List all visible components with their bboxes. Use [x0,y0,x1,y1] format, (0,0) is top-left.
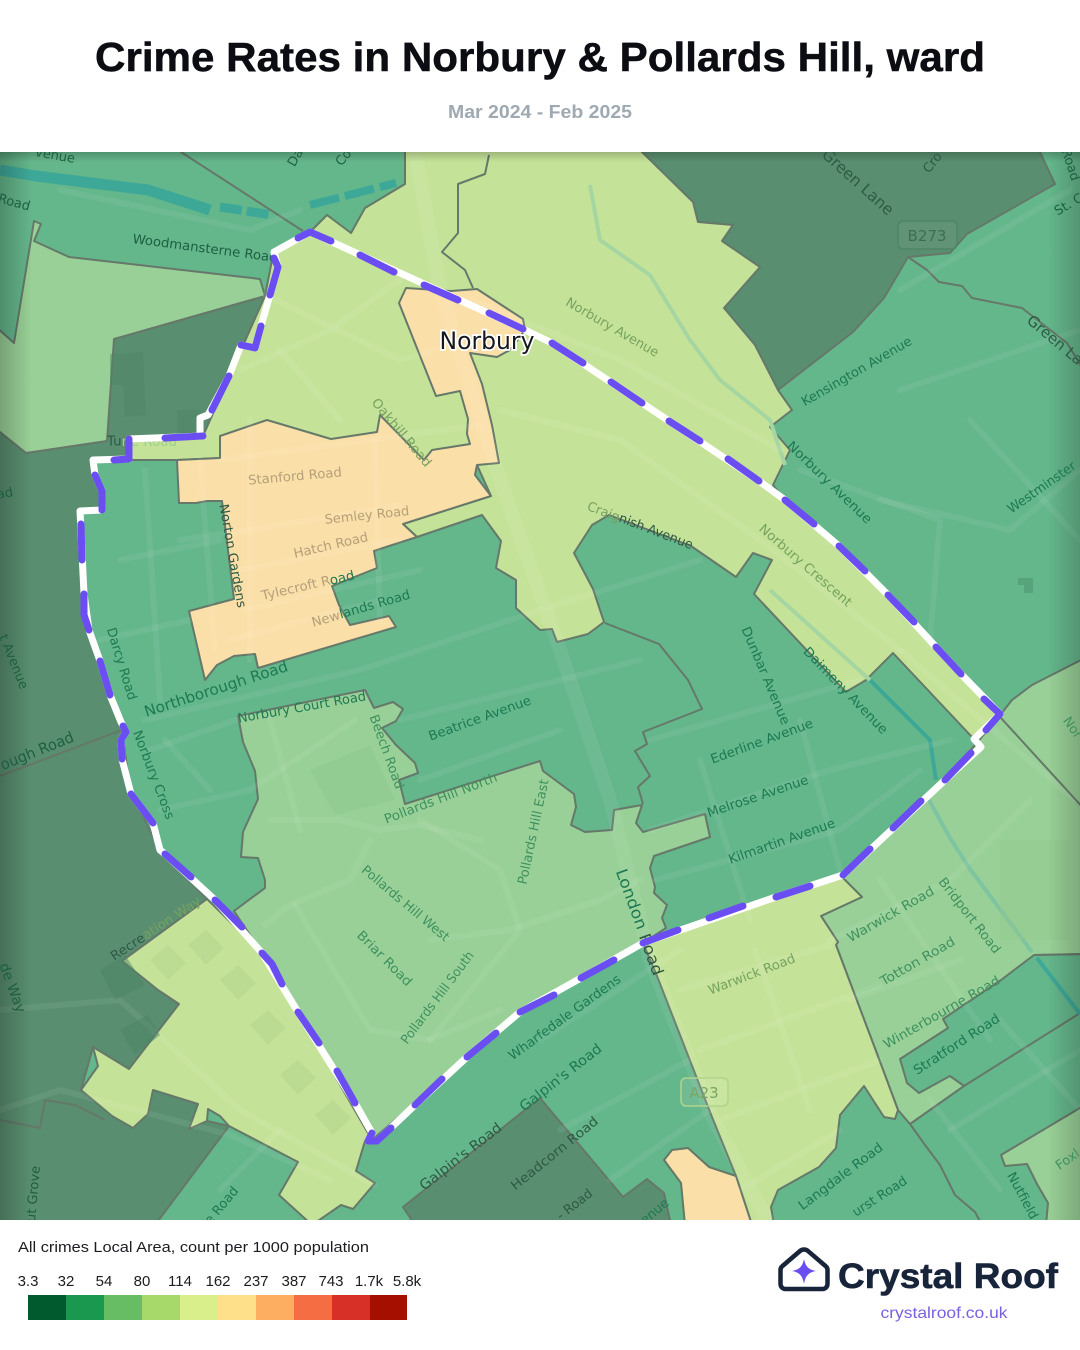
place label: Norbury: Norbury [440,327,534,355]
legend: scale values: 743 [318,1273,344,1290]
road labels: Recreation Way [108,894,204,964]
road shield: A23 [681,1078,728,1106]
logo icon: house with star [780,1249,828,1289]
road labels: Wharfedale Gardens [506,972,624,1064]
road labels: Ederline Avenue [709,716,815,768]
ward boundary: white casing [80,232,1000,1141]
road labels: Bridport Road [935,875,1003,957]
road labels: Pollards Hill West [358,863,452,945]
legend: scale values: 114 [168,1273,192,1290]
choropleth: light green areas [0,221,1080,1225]
building footprints and parkland texture [100,352,1070,1135]
legend: scale values: 387 [281,1273,307,1290]
road labels: - Road [554,1186,596,1224]
road labels: Craignish Avenue [585,499,695,553]
choropleth: yellow-green areas [81,150,1001,1225]
road labels: Nutfield [1003,1170,1041,1222]
road labels: Pollards Hill South [398,949,478,1047]
road labels: Norbury Avenue [784,439,874,527]
waterways [0,170,1080,1014]
road labels: Tylecroft Road [259,568,356,604]
road labels: e Road [202,1184,242,1228]
road labels: Warwick Road [845,884,937,946]
road labels: Daimeny Avenue [800,644,890,738]
road labels: Winterbourne Road [881,974,1003,1052]
road labels: Galpin's Road [517,1041,605,1115]
road labels: Norton Gardens [215,503,249,609]
road labels: Galpin's Road [417,1120,505,1194]
road labels: London Road [612,866,668,978]
road labels: Cro [920,150,946,176]
title: Crime Rates in Norbury & Pollards Hill, ward [95,34,985,80]
road labels: Hatch Road [292,530,370,562]
legend: scale values: 32 [58,1273,74,1290]
road labels: venue [34,145,76,167]
road labels: Kensington Avenue [799,334,915,410]
road labels: Darcy Road [103,626,139,702]
choropleth: low-crime dark areas [0,150,1055,1225]
road labels: Westminster [1005,459,1080,517]
road labels: Woodmansterne Road [132,232,278,266]
legend: scale values: 5.8k [393,1273,422,1290]
road labels: Beatrice Avenue [427,693,533,745]
road labels: Norbury Avenue [563,295,661,361]
subtitle: date range: Mar 2024 - Feb 2025 [448,102,632,122]
road labels: urst Road [850,1174,910,1220]
road labels: Melrose Avenue [705,773,811,821]
legend: scale values [18,1273,422,1290]
road shield: B273: B273 [908,227,946,245]
road labels: Oakhill Road [368,396,434,470]
road labels: Co [333,147,355,169]
legend: scale values: 162 [205,1273,231,1290]
road shield: A23: A23 [689,1084,719,1102]
legend: scale values: 54 [96,1273,112,1290]
legend: colour scale [28,1295,407,1320]
legend: scale values: 1.7k [355,1273,384,1290]
road labels: ut Grove [24,1165,44,1223]
road labels: Newlands Road [310,588,412,630]
road labels: Norbury Court Road [237,689,367,727]
ward boundary: purple dashes [81,232,1000,1141]
website link: crystalroof.co.uk [880,1305,1009,1322]
road shield: B273 [898,221,957,249]
road labels: Green Lane [818,145,898,219]
choropleth: cream higher-crime areas [177,288,752,1225]
road labels: Norbury Cross [129,728,177,822]
sector boundary lines [0,152,1080,1225]
road labels: Langdale Road [796,1140,886,1214]
road labels: Briar Road [353,928,415,990]
road labels: enue [638,1196,672,1228]
road labels: Dunbar Avenue [738,625,792,727]
road labels: Pollards Hill North [382,770,500,828]
road labels: Stanford Road [248,465,342,489]
road network [0,152,1080,1225]
road labels: Turle Road [106,434,177,450]
road labels: Pollards Hill East [516,778,552,886]
vignette [0,152,1080,1220]
legend: scale values: 80 [134,1273,150,1290]
road labels: Semley Road [324,504,410,528]
road labels: Stratford Road [911,1011,1003,1079]
road labels: Beech Road [366,713,406,791]
road labels: Kilmartin Avenue [727,816,837,868]
logo wordmark: Crystal Roof [838,1257,1058,1296]
legend: scale values: 3.3 [18,1273,38,1290]
legend title: All crimes Local Area, count per 1000 population [18,1239,369,1256]
road labels: Totton Road [877,935,958,990]
road labels: Norbury Crescent [756,522,854,610]
road labels: Warwick Road [706,952,798,998]
road labels: Da [285,146,307,170]
road labels: Northborough Road [142,657,290,721]
road labels: Headcorn Road [508,1114,602,1194]
legend: scale values: 237 [243,1273,269,1290]
